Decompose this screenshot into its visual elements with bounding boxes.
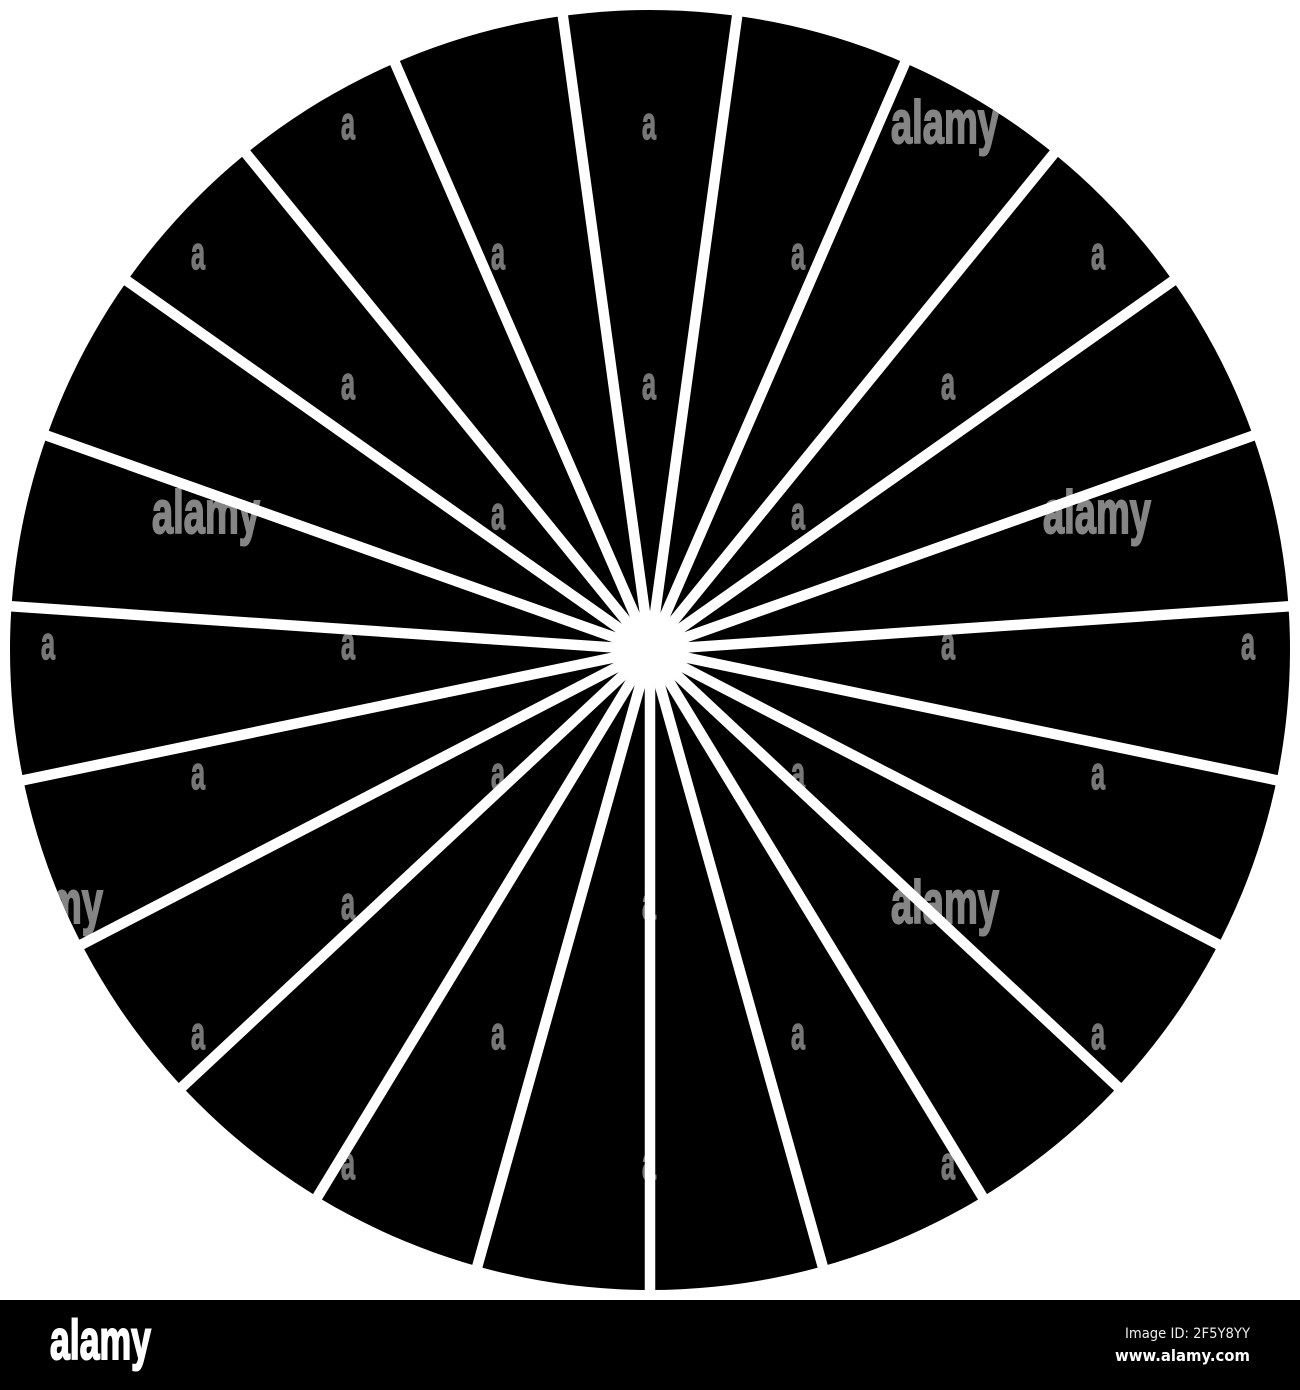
watermark pattern: a xyxy=(642,877,656,929)
watermark pattern: a xyxy=(791,227,805,279)
footer logo: alamy xyxy=(50,1308,151,1371)
watermark pattern: a xyxy=(491,747,505,799)
watermark pattern: a xyxy=(941,617,955,669)
watermark pattern: alamy xyxy=(1043,479,1151,546)
watermark pattern: a xyxy=(791,487,805,539)
watermark pattern: a xyxy=(341,1137,355,1189)
watermark pattern: a xyxy=(791,1007,805,1059)
watermark pattern: a xyxy=(341,97,355,149)
watermark pattern: a xyxy=(1091,1007,1105,1059)
watermark pattern: a xyxy=(1091,747,1105,799)
watermark pattern: a xyxy=(491,227,505,279)
watermark pattern: alamy xyxy=(0,869,103,936)
watermark pattern: a xyxy=(191,747,205,799)
watermark pattern: alamy xyxy=(891,869,999,936)
watermark pattern: a xyxy=(1241,617,1255,669)
watermark pattern: a xyxy=(642,97,656,149)
watermark pattern: a xyxy=(941,1137,955,1189)
watermark pattern: alamy xyxy=(891,89,999,156)
watermark pattern xyxy=(0,89,1255,1189)
website: www.alamy.com xyxy=(1115,1346,1250,1365)
watermark pattern: a xyxy=(341,877,355,929)
watermark pattern: a xyxy=(941,357,955,409)
watermark pattern: alamy xyxy=(152,479,260,546)
watermark pattern: a xyxy=(41,617,55,669)
image id: Image ID: 2F5Y8YY xyxy=(1125,1326,1250,1342)
watermark pattern: a xyxy=(642,357,656,409)
watermark pattern: a xyxy=(191,1007,205,1059)
watermark pattern: a xyxy=(491,487,505,539)
watermark pattern: a xyxy=(341,617,355,669)
watermark pattern: a xyxy=(1091,227,1105,279)
watermark pattern: a xyxy=(791,747,805,799)
watermark pattern: a xyxy=(191,227,205,279)
watermark pattern: a xyxy=(491,1007,505,1059)
footer bar xyxy=(0,1300,1300,1390)
watermark pattern: a xyxy=(642,1137,656,1189)
white centre hub xyxy=(612,611,688,687)
watermark pattern: a xyxy=(341,357,355,409)
